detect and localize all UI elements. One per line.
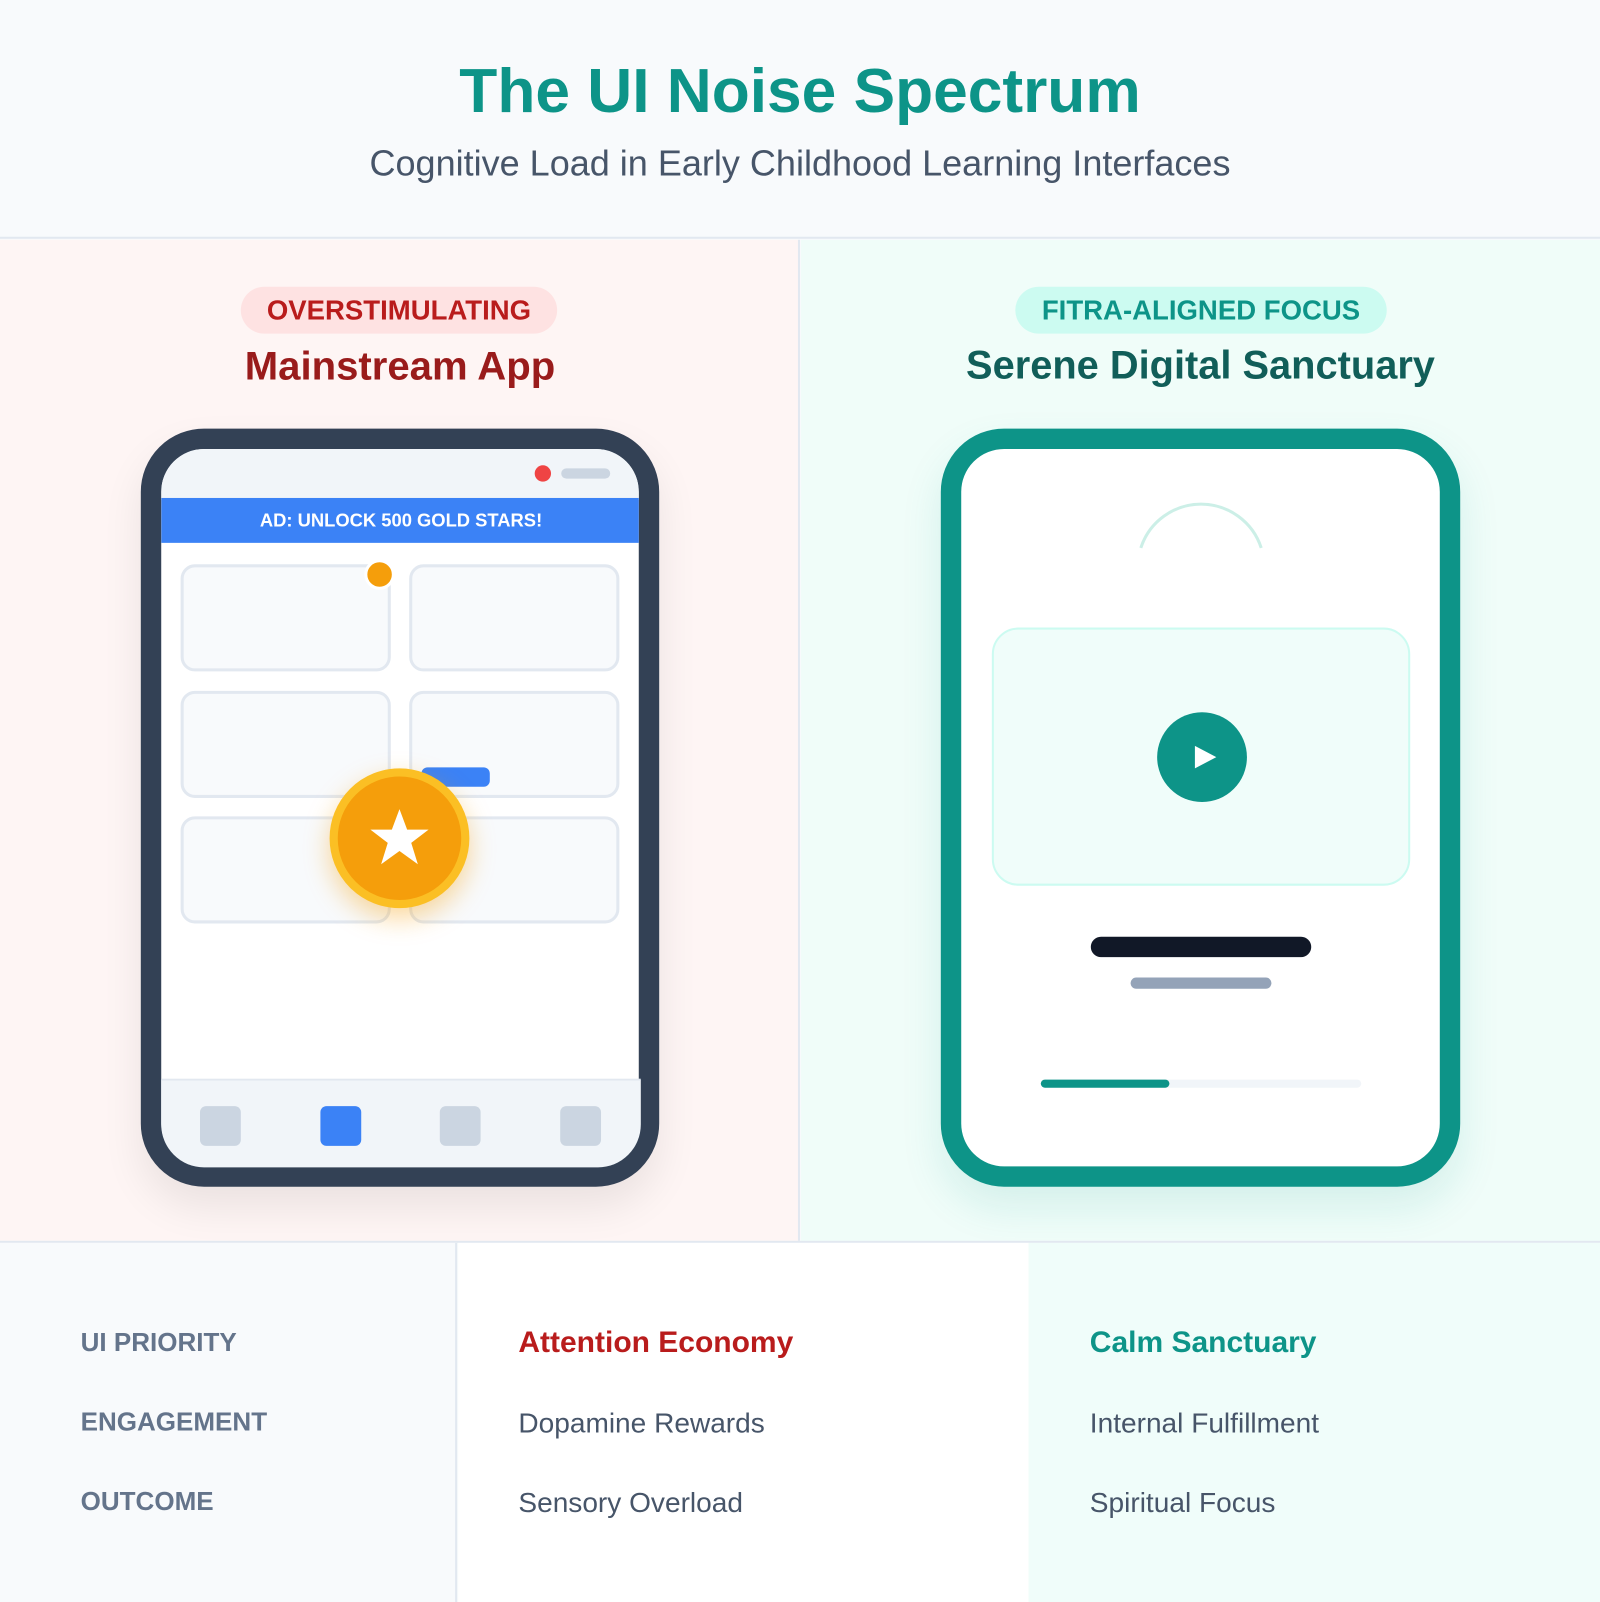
panel: mainstream app [0,240,800,1241]
progress bar [1041,1080,1361,1088]
badge: overstimulating: OVERSTIMULATING [267,295,531,326]
title: The UI Noise Spectrum [459,56,1141,126]
card grid [180,564,620,924]
ad banner: AD: UNLOCK 500 GOLD STARS! [260,510,542,531]
blue pill [421,767,490,787]
phone: mainstream [141,429,659,1187]
status dot [535,465,551,482]
subtitle: Cognitive Load in Early Childhood Learning Interfaces [370,144,1230,184]
comparison table: Spiritual Focus [1090,1487,1275,1518]
comparison table: Sensory Overload [518,1487,743,1518]
comparison table: OUTCOME [81,1488,214,1516]
notification dot [364,559,395,590]
column: mainstream: Attention Economy [518,1326,793,1359]
icon: play [1157,712,1247,802]
phone: serene [941,429,1460,1187]
heading: serene digital sanctuary: Serene Digital Sanctuary [966,344,1435,388]
arc [1140,502,1262,548]
video box [992,628,1410,886]
title bar [1091,937,1311,957]
comparison table: Internal Fulfillment [1090,1407,1319,1439]
ad banner [161,498,641,543]
badge: fitra-aligned focus [1015,287,1387,334]
comparison table: Dopamine Rewards [518,1407,765,1439]
row labels: UI PRIORITY [81,1329,237,1357]
header [0,0,1600,239]
icon: gold star coin [330,768,469,908]
comparison table: ENGAGEMENT [81,1408,267,1437]
badge: overstimulating [241,287,557,334]
bottom nav [161,1079,641,1167]
comparison table [0,1241,1600,1600]
badge: fitra-aligned focus: FITRA-ALIGNED FOCUS [1042,295,1360,326]
panel: serene sanctuary [801,240,1600,1241]
column: sanctuary: Calm Sanctuary [1090,1326,1316,1359]
heading: mainstream app: Mainstream App [245,344,555,389]
